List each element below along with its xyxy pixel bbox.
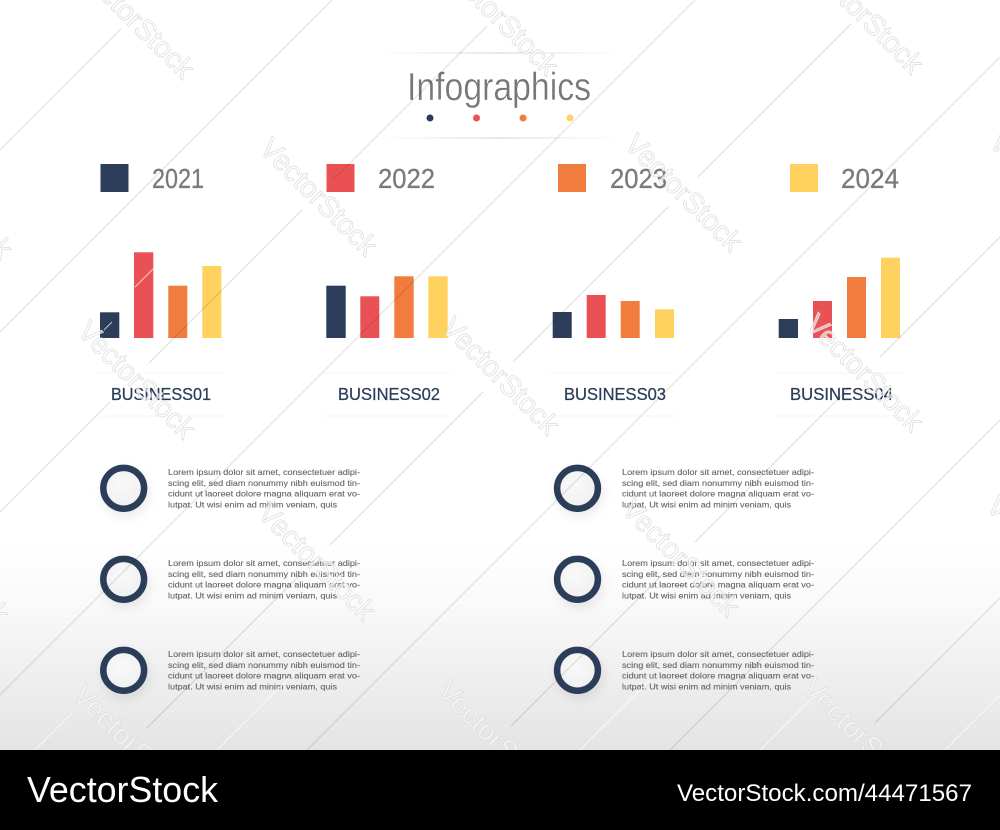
bar chart: business 03	[553, 295, 674, 338]
text block: left 3: Lorem ipsum dolor sit amet, consectetuer adipi-	[168, 649, 360, 659]
text block: left 2: cidunt ut laoreet dolore magna aliquam erat vo-	[168, 580, 360, 590]
icon ring: left 2	[103, 559, 144, 600]
text block: right 1: lutpat. Ut wisi enim ad minim veniam, quis	[622, 500, 792, 510]
text block: left 1: scing elit, sed diam nonummy nibh euismod tin-	[168, 478, 360, 488]
text block: left 3	[168, 649, 360, 692]
watermarks: VectorStock	[66, 679, 196, 810]
bar chart: business 01	[100, 252, 221, 338]
label: business 03: BUSINESS03	[564, 384, 666, 404]
footer bar	[0, 750, 1000, 830]
title: Infographics	[407, 66, 591, 109]
legend: 2021	[152, 163, 204, 194]
watermarks: VectorStock	[253, 132, 383, 263]
icon ring: right 3	[557, 650, 598, 691]
text block: left 2	[168, 558, 360, 600]
text block: left 3: lutpat. Ut wisi enim ad minim veniam, quis	[168, 682, 338, 692]
watermarks: VectorStock	[615, 493, 745, 624]
watermarks: VectorStock	[435, 311, 565, 442]
label: business 02: BUSINESS02	[338, 384, 440, 404]
footer url: VectorStock.com/44471567	[677, 780, 972, 807]
icon ring: left 3	[103, 650, 144, 691]
text block: right 2: Lorem ipsum dolor sit amet, consectetuer adipi-	[622, 558, 814, 568]
text block: right 2	[622, 558, 814, 600]
text block: right 2: cidunt ut laoreet dolore magna aliquam erat vo-	[622, 580, 814, 590]
watermarks: VectorStock	[796, 672, 926, 803]
watermarks: VectorStock	[71, 315, 201, 446]
text block: right 1: scing elit, sed diam nonummy nibh euismod tin-	[622, 478, 814, 488]
watermarks: VectorStock	[251, 497, 381, 628]
text block: right 3: Lorem ipsum dolor sit amet, consectetuer adipi-	[622, 649, 814, 659]
bar chart: business 04	[779, 258, 900, 338]
legend	[100, 163, 899, 194]
legend: 2022	[378, 163, 435, 194]
text block: right 3: scing elit, sed diam nonummy nibh euismod tin-	[622, 660, 814, 670]
text block: left 2: lutpat. Ut wisi enim ad minim veniam, quis	[168, 590, 338, 600]
text block: right 3: lutpat. Ut wisi enim ad minim veniam, quis	[622, 682, 792, 692]
text block: right 1: Lorem ipsum dolor sit amet, consectetuer adipi-	[622, 467, 814, 477]
icon ring: right 1	[557, 468, 598, 509]
text block: left 1: lutpat. Ut wisi enim ad minim veniam, quis	[168, 500, 338, 510]
icon ring: right 2	[557, 559, 598, 600]
text block: right 2: scing elit, sed diam nonummy nibh euismod tin-	[622, 569, 814, 579]
text block: left 1: Lorem ipsum dolor sit amet, consectetuer adipi-	[168, 467, 360, 477]
legend: 2023	[610, 163, 667, 194]
watermarks: VectorStock	[618, 128, 748, 259]
label: business 04: BUSINESS04	[790, 384, 893, 404]
footer brand: VectorStock	[27, 769, 219, 810]
text block: left 2: scing elit, sed diam nonummy nibh euismod tin-	[168, 569, 360, 579]
text block: right 1: cidunt ut laoreet dolore magna aliquam erat vo-	[622, 488, 814, 498]
text block: left 1	[168, 467, 360, 510]
legend: 2024	[841, 163, 899, 194]
watermarks: VectorStock	[799, 308, 929, 439]
title dots	[426, 114, 574, 122]
text block: right 3: cidunt ut laoreet dolore magna aliquam erat vo-	[622, 670, 814, 680]
text block: left 2: Lorem ipsum dolor sit amet, consectetuer adipi-	[168, 558, 360, 568]
text block: left 3: scing elit, sed diam nonummy nibh euismod tin-	[168, 660, 360, 670]
text block: right 3	[622, 649, 814, 692]
label: business 01: BUSINESS01	[111, 384, 211, 404]
text block: right 1	[622, 467, 814, 510]
bar chart: business 02	[326, 276, 448, 338]
text block: left 1: cidunt ut laoreet dolore magna aliquam erat vo-	[168, 488, 360, 498]
watermarks: VectorStock	[431, 675, 561, 806]
icon ring: left 1	[103, 468, 144, 509]
text block: left 3: cidunt ut laoreet dolore magna aliquam erat vo-	[168, 670, 360, 680]
text block: right 2: lutpat. Ut wisi enim ad minim veniam, quis	[622, 590, 792, 600]
